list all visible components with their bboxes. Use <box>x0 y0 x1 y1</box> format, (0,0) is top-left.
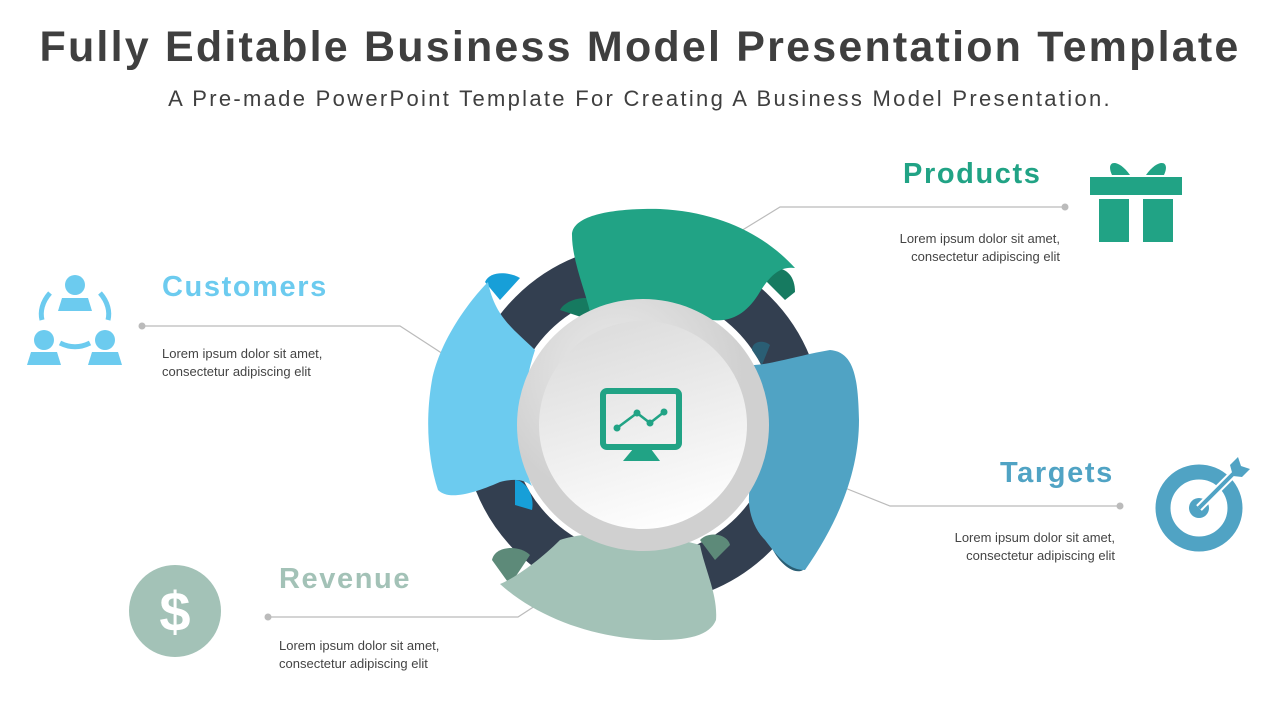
text: products <box>900 231 1060 264</box>
icon: gift <box>1090 163 1182 242</box>
text: customers: Lorem ipsum dolor sit amet, <box>162 346 322 361</box>
center disc <box>517 299 769 551</box>
text: products: consectetur adipiscing elit <box>911 249 1060 264</box>
icon: target <box>1163 457 1250 544</box>
heading: customers: Customers <box>162 271 328 303</box>
heading: revenue: Revenue <box>279 563 411 595</box>
icon: customers <box>27 275 122 365</box>
heading: targets: Targets <box>1000 457 1114 489</box>
segment: revenue <box>492 533 730 640</box>
heading: products: Products <box>903 158 1042 190</box>
text: targets <box>955 530 1115 563</box>
text: customers: consectetur adipiscing elit <box>162 364 311 379</box>
text: targets: Lorem ipsum dolor sit amet, <box>955 530 1115 545</box>
text: revenue <box>279 638 439 671</box>
text: customers <box>162 346 322 379</box>
subtitle: A Pre-made PowerPoint Template For Creating A Business Model Presentation. <box>168 86 1112 111</box>
text: revenue: consectetur adipiscing elit <box>279 656 428 671</box>
segment: customers <box>428 273 535 510</box>
text: revenue: Lorem ipsum dolor sit amet, <box>279 638 439 653</box>
icon: monitor chart <box>603 391 679 461</box>
dark ring <box>487 268 799 580</box>
text: products: Lorem ipsum dolor sit amet, <box>900 231 1060 246</box>
icon: dollar: $ <box>159 580 191 643</box>
segment: products <box>560 209 795 320</box>
segment: targets <box>749 342 859 571</box>
title: Fully Editable Business Model Presentation Template <box>40 23 1240 71</box>
text: targets: consectetur adipiscing elit <box>966 548 1115 563</box>
icon: dollar <box>129 565 221 657</box>
connector lines <box>142 207 1120 617</box>
